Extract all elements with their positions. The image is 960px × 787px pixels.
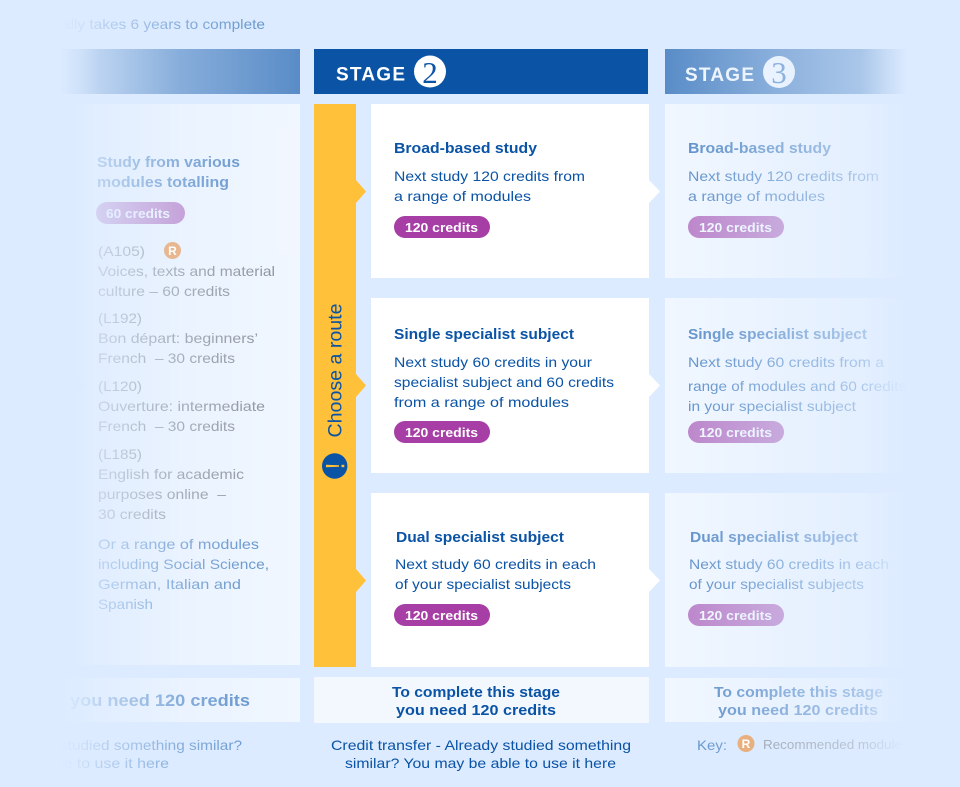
panel: single specialist subject: from a range of modules: [394, 394, 569, 410]
stage 3 single specialist panel: 120 credits: [699, 426, 772, 440]
credit transfer note: Credit transfer - Already studied something: [331, 737, 631, 753]
intro text: ally takes 6 years to complete: [62, 16, 265, 32]
stage 3 header: [665, 49, 955, 94]
stage 3 broad-based panel: [665, 104, 955, 278]
credits pill: 120 credits: [405, 609, 478, 623]
module list: French – 30 credits: [98, 350, 235, 366]
stage 1 credit transfer note: le to use it here: [60, 755, 169, 771]
stage 1 total box: you need 120 credits: [70, 692, 250, 710]
credits pill: 120 credits: [405, 426, 478, 440]
panel: dual specialist subject: Next study 60 credits in each: [395, 556, 596, 572]
module list: Bon départ: beginners’: [98, 330, 258, 346]
stage 2 total box: you need 120 credits: [396, 703, 556, 719]
panel: broad-based study: Next study 120 credits from: [394, 168, 585, 184]
panel: single specialist subject: specialist subject and 60 credits: [394, 374, 614, 390]
module list: (L192): [98, 310, 142, 326]
stage 1 credit transfer note: studied something similar?: [60, 737, 242, 753]
stage 3 total box: [665, 678, 955, 722]
stage 3 dual specialist panel: Next study 60 credits in each: [689, 556, 889, 572]
module list: 30 credits: [98, 506, 166, 522]
panel: dual specialist subject: [371, 493, 660, 667]
stage 1 credits pill: 60 credits: [106, 207, 170, 221]
fade overlay right: [665, 0, 960, 787]
module list: (A105): [98, 243, 145, 259]
stage 3 single specialist panel: [665, 298, 955, 473]
module list: [98, 243, 275, 522]
other modules note: Spanish: [98, 596, 153, 612]
stage 3 total box: you need 120 credits: [718, 703, 878, 719]
stage 3 header: STAGE: [685, 65, 754, 86]
panel: dual specialist subject: Dual specialist subject: [396, 530, 564, 546]
module list: (L120): [98, 378, 142, 394]
stage 3 broad-based panel: Next study 120 credits from: [688, 168, 879, 184]
credit transfer note: [331, 737, 631, 771]
stage 3 dual specialist panel: [665, 493, 955, 667]
stage 1 total box: [40, 678, 300, 722]
stage 3 single specialist panel: range of modules and 60 credits: [688, 378, 906, 394]
credits pill: [394, 604, 490, 626]
icon: recommended badge in key: R: [742, 737, 751, 751]
key: Recommended module: [763, 737, 902, 752]
stage 3 single specialist panel: Single specialist subject: [688, 327, 867, 343]
panel: broad-based study: [371, 104, 660, 278]
stage 1 credits pill: [96, 202, 185, 224]
panel: single specialist subject: [371, 298, 660, 473]
stage 1 heading: modules totalling: [97, 175, 229, 191]
stage 3 header: 3: [771, 55, 787, 90]
key: [697, 737, 902, 753]
module list: Ouverture: intermediate: [98, 398, 265, 414]
stage 3 dual specialist panel: of your specialist subjects: [689, 576, 864, 592]
fade overlay left: [0, 0, 300, 787]
stage 1 heading: [97, 155, 240, 191]
panel: single specialist subject: Single specialist subject: [394, 327, 574, 343]
stage 2 total box: To complete this stage: [392, 685, 560, 701]
other modules note: [98, 536, 269, 612]
panel: single specialist subject: Next study 60 credits in your: [394, 354, 592, 370]
panel: dual specialist subject: of your specialist subjects: [395, 576, 571, 592]
credits pill: 120 credits: [405, 221, 478, 235]
stage 3 broad-based panel: 120 credits: [699, 221, 772, 235]
module list: French – 30 credits: [98, 418, 235, 434]
module list: culture – 60 credits: [98, 283, 230, 299]
stage 1 heading: Study from various: [97, 155, 240, 171]
stage 3 column (faded): [665, 49, 955, 753]
icon: recommended badge in key: [738, 735, 754, 752]
credits pill: [394, 421, 490, 443]
stage 1 credit transfer note: [60, 737, 242, 771]
panel: broad-based study: a range of modules: [394, 188, 531, 204]
key: Key:: [697, 737, 727, 753]
stage 2 total box: [314, 677, 649, 723]
module list: English for academic: [98, 466, 244, 482]
icon: exclamation: [322, 453, 347, 479]
stage 1 header bar: [40, 49, 300, 94]
other modules note: Or a range of modules: [98, 536, 259, 552]
stage 3 single specialist panel: Next study 60 credits from a: [688, 354, 884, 370]
choose a route bar: [314, 104, 366, 667]
icon: recommended badge in stage 1: R: [168, 244, 177, 258]
panel: broad-based study: Broad-based study: [394, 141, 537, 157]
stage 3 broad-based panel: Broad-based study: [688, 141, 831, 157]
module list: purposes online –: [98, 486, 226, 502]
credits pill: [394, 216, 490, 238]
stage 3 broad-based panel: a range of modules: [688, 188, 825, 204]
other modules note: including Social Science,: [98, 556, 269, 572]
stage 3 total box: To complete this stage: [714, 685, 883, 701]
stage 2 header: STAGE: [336, 64, 405, 86]
stage 1 panel: [75, 104, 300, 665]
stage 2 header: 2: [422, 55, 438, 90]
stage 3 dual specialist panel: Dual specialist subject: [690, 530, 858, 546]
stage 2 header: [314, 49, 648, 94]
stage 3 single specialist panel: in your specialist subject: [688, 398, 856, 414]
module list: (L185): [98, 446, 142, 462]
stage 1 column (faded): [40, 16, 300, 771]
stage 3 dual specialist panel: 120 credits: [699, 609, 772, 623]
other modules note: German, Italian and: [98, 576, 241, 592]
icon: recommended badge in stage 1: [164, 242, 181, 259]
credit transfer note: similar? You may be able to use it here: [345, 755, 616, 771]
module list: Voices, texts and material: [98, 263, 275, 279]
route label: Choose a route: [326, 304, 346, 438]
